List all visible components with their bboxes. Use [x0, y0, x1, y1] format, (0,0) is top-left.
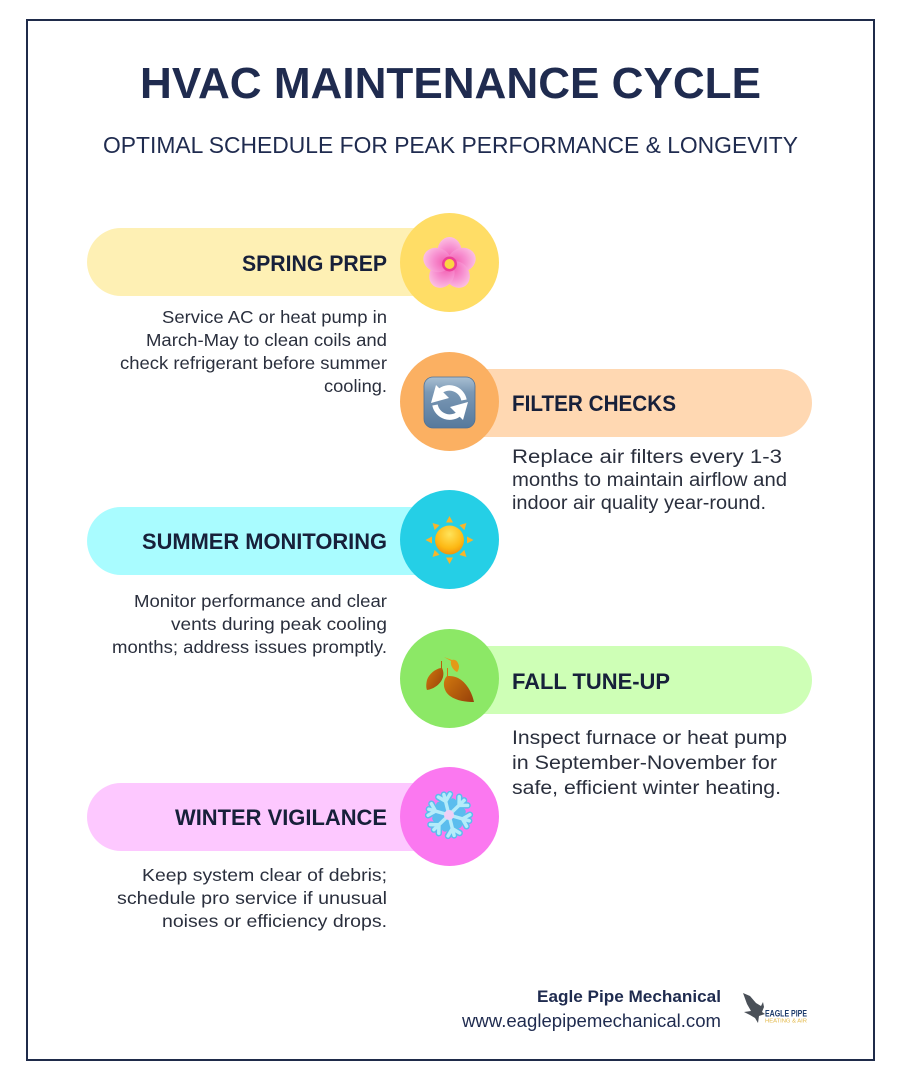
panel: summer monitoring — [87, 490, 499, 657]
panel: filter checks — [400, 352, 812, 514]
fall heading bar — [449, 646, 812, 714]
filter description: months to maintain airflow and — [512, 470, 787, 491]
winter heading: WINTER VIGILANCE — [175, 805, 387, 830]
fall description — [512, 728, 787, 799]
summer description — [112, 591, 387, 657]
winter description: noises or efficiency drops. — [162, 911, 387, 931]
logo: eagle pipe heating & air — [743, 993, 807, 1024]
footer: company name and website: Eagle Pipe Mechanical — [537, 987, 721, 1006]
fall heading: FALL TUNE-UP — [512, 669, 670, 694]
spring description: check refrigerant before summer — [120, 353, 387, 373]
summer circle — [400, 490, 499, 589]
summer description: Monitor performance and clear — [134, 591, 387, 611]
panel: fall tune-up — [400, 629, 812, 799]
footer: company name and website — [461, 987, 721, 1031]
winter heading bar — [87, 783, 450, 851]
filter heading: FILTER CHECKS — [512, 391, 676, 416]
fall description: in September-November for — [512, 753, 778, 774]
fall description: safe, efficient winter heating. — [512, 778, 781, 799]
winter description — [117, 865, 387, 931]
summer heading bar — [87, 507, 450, 575]
icon: sun — [426, 516, 474, 564]
icon: fallen leaves — [426, 657, 474, 702]
winter circle — [400, 767, 499, 866]
spring heading: SPRING PREP — [242, 251, 387, 276]
winter description: schedule pro service if unusual — [117, 888, 387, 908]
subtitle: OPTIMAL SCHEDULE FOR PEAK PERFORMANCE & LONGEVITY — [103, 132, 798, 158]
spring circle — [400, 213, 499, 312]
logo: eagle pipe heating & air: EAGLE PIPE — [765, 1008, 807, 1018]
filter description: indoor air quality year-round. — [512, 493, 766, 514]
spring description — [120, 307, 387, 396]
filter description: Replace air filters every 1-3 — [512, 447, 782, 468]
title: HVAC MAINTENANCE CYCLE — [140, 59, 761, 108]
filter heading bar — [449, 369, 812, 437]
logo: eagle pipe heating & air: HEATING & AIR — [765, 1018, 807, 1024]
fall circle — [400, 629, 499, 728]
icon: refresh arrows — [424, 377, 475, 428]
spring description: cooling. — [324, 376, 387, 396]
summer heading: SUMMER MONITORING — [142, 529, 387, 554]
summer description: months; address issues promptly. — [112, 637, 387, 657]
spring heading bar — [87, 228, 450, 296]
icon: cherry blossom — [420, 237, 479, 293]
panel: winter vigilance — [87, 767, 499, 931]
spring description: Service AC or heat pump in — [162, 307, 387, 327]
filter circle — [400, 352, 499, 451]
summer description: vents during peak cooling — [171, 614, 387, 634]
panel: spring prep — [87, 213, 499, 396]
spring description: March-May to clean coils and — [146, 330, 387, 350]
fall description: Inspect furnace or heat pump — [512, 728, 787, 749]
filter description — [512, 447, 787, 514]
footer: company name and website: www.eaglepipemechanical.com — [461, 1011, 721, 1031]
winter description: Keep system clear of debris; — [142, 865, 387, 885]
icon: snowflake — [423, 789, 475, 841]
